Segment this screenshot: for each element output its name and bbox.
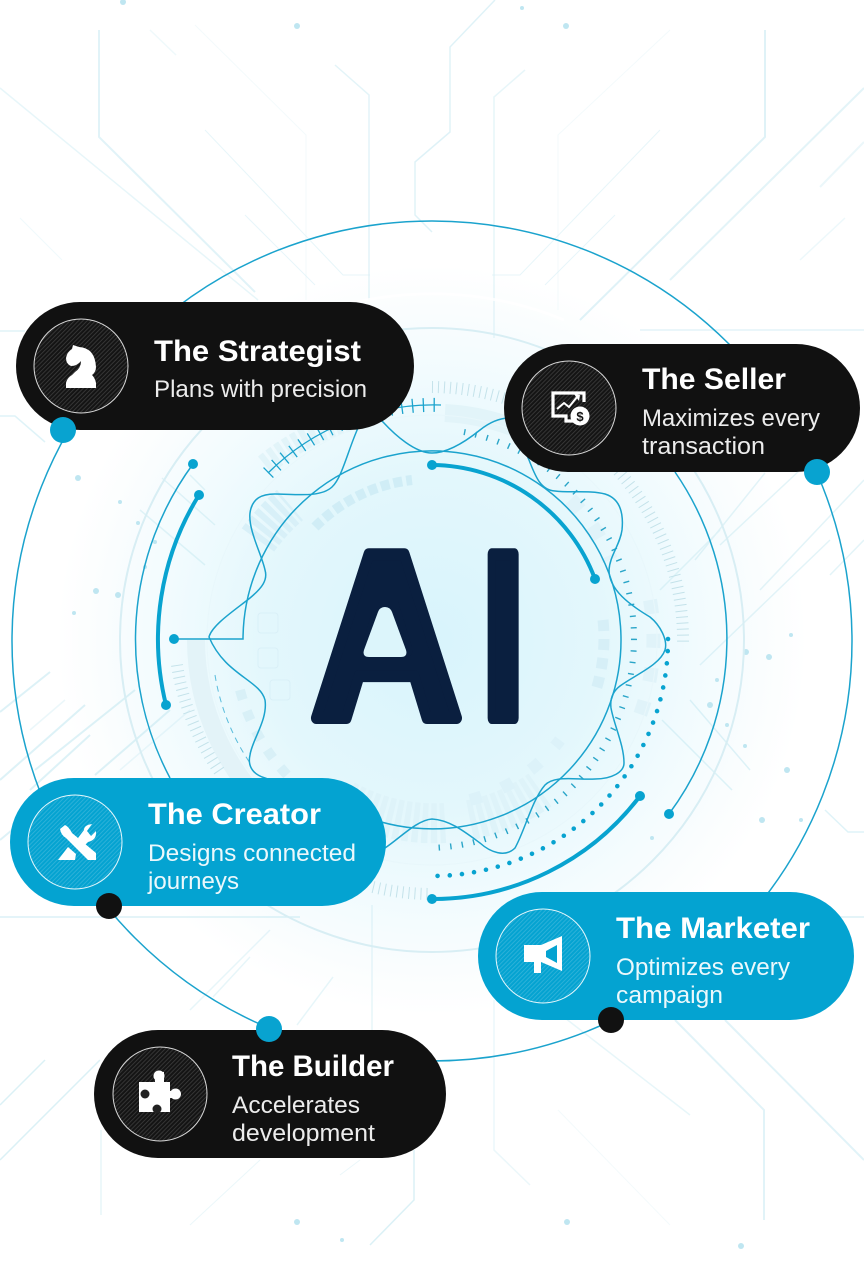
panel: The Creator xyxy=(10,778,386,906)
outer connecting circle xyxy=(12,221,852,1061)
panel: The Builder xyxy=(94,1030,446,1158)
description: Accelerates xyxy=(232,1092,360,1119)
panel: The Creator: journeys xyxy=(147,868,239,895)
cross-hatched arc xyxy=(268,405,441,473)
pill xyxy=(10,778,386,906)
faint outer ring xyxy=(120,328,744,952)
AI title: A xyxy=(311,502,462,769)
heading: The Builder xyxy=(232,1050,394,1083)
arc end dots xyxy=(161,459,674,904)
white halo arc xyxy=(300,294,564,320)
tick arc xyxy=(432,432,634,848)
pill xyxy=(478,892,854,1020)
panel: The Marketer xyxy=(478,892,854,1020)
central glow xyxy=(57,265,807,1015)
description: Optimizes every xyxy=(616,954,790,981)
icon: sales chart monitor: $ xyxy=(576,409,584,424)
heading: The Strategist xyxy=(154,335,361,368)
icon: sales chart monitor xyxy=(522,361,616,455)
pill xyxy=(94,1030,446,1158)
icon: megaphone xyxy=(496,909,590,1003)
panel: The Seller xyxy=(504,344,860,472)
fine tick arcs xyxy=(177,387,683,894)
panel: The Builder: development xyxy=(232,1120,375,1147)
pill xyxy=(16,302,414,430)
icon: puzzle piece xyxy=(113,1047,207,1141)
heading: The Seller xyxy=(642,363,786,396)
panel: The Seller: transaction xyxy=(642,433,765,460)
icon: crossed tools xyxy=(28,795,122,889)
panel: The Strategist xyxy=(16,302,414,430)
thick arcs xyxy=(158,465,640,899)
dotted arc xyxy=(432,639,668,876)
description: Maximizes every xyxy=(642,405,820,432)
panel: The Marketer: campaign xyxy=(616,982,723,1009)
description: Designs connected xyxy=(148,840,356,867)
description: Plans with precision xyxy=(154,376,367,403)
pill xyxy=(504,344,860,472)
wave line xyxy=(209,418,666,853)
pale technical bands xyxy=(196,413,657,865)
dashed thin arc xyxy=(215,675,250,763)
heading: The Creator xyxy=(148,798,321,831)
heading: The Marketer xyxy=(616,912,810,945)
connector nodes xyxy=(50,417,830,1042)
AI title: I xyxy=(481,503,525,769)
icon: chess knight xyxy=(34,319,128,413)
ring arcs xyxy=(135,451,727,829)
